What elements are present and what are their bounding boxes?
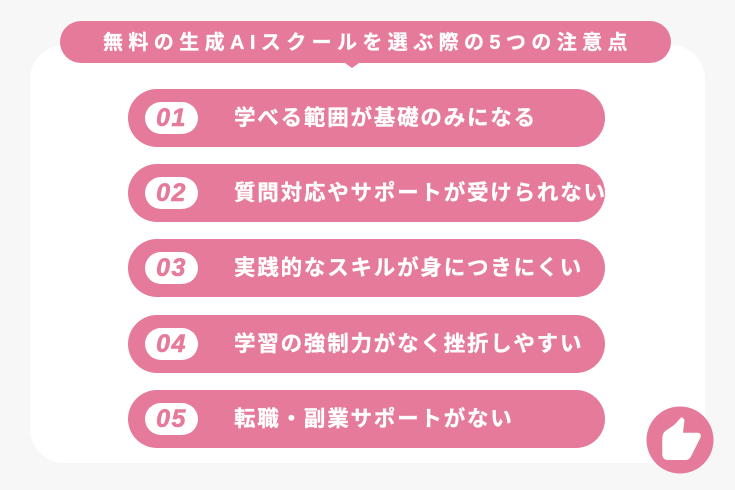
banner pointer (345, 63, 359, 68)
badge 05 (145, 403, 198, 435)
badge 04: 04 (156, 330, 187, 358)
list item 05 (128, 390, 605, 448)
item 04 text: 学習の強制力がなく挫折しやすい (234, 332, 583, 356)
title banner (60, 21, 671, 63)
badge 05: 05 (156, 405, 187, 433)
item 01 text: 学べる範囲が基礎のみになる (234, 106, 537, 130)
title text: 無料の生成AIスクールを選ぶ際の5つの注意点 (103, 32, 633, 54)
badge 02: 02 (156, 179, 187, 207)
icon: thumbs up (646, 406, 714, 474)
badge 04 (145, 328, 198, 360)
list item 01 (128, 89, 605, 147)
list item 03 (128, 239, 605, 297)
badge 03: 03 (156, 254, 187, 282)
badge 01 (145, 102, 198, 134)
list item 04 (128, 315, 605, 373)
item 05 text: 転職・副業サポートがない (234, 407, 514, 431)
badge 03 (145, 252, 198, 284)
item 02 text: 質問対応やサポートが受けられない (234, 181, 607, 205)
badge 02 (145, 177, 198, 209)
item 03 text: 実践的なスキルが身につきにくい (234, 256, 583, 280)
badge 01: 01 (156, 104, 187, 132)
list item 02 (128, 164, 605, 222)
panel: white background card (30, 45, 705, 463)
